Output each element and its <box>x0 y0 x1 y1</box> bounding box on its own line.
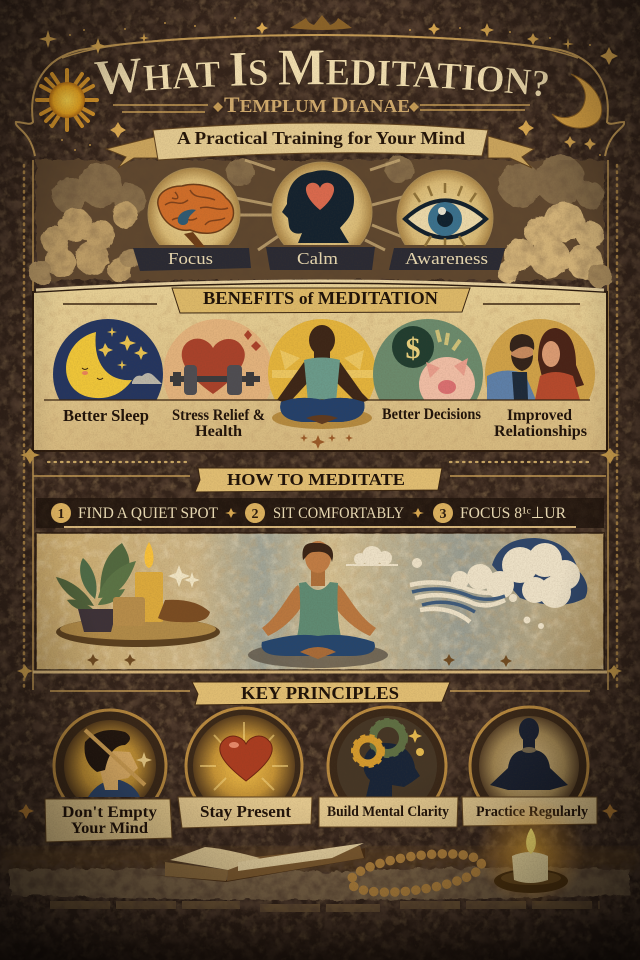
label: Improved Relationships <box>494 407 587 440</box>
icon: improved relationships <box>485 319 595 400</box>
icon: cloud and waves of thought <box>346 538 587 629</box>
label: Don't Empty Your Mind: Your Mind <box>71 820 148 837</box>
icon: sparkles <box>168 565 200 588</box>
heading: key principles <box>192 682 450 705</box>
label: Focus: Focus <box>168 249 213 268</box>
meditating figure legs (foreground) <box>280 398 364 424</box>
label: Improved Relationships: Improved <box>507 407 572 424</box>
icon: plant, candle and tray <box>56 542 220 647</box>
still life: stone table <box>0 860 640 920</box>
medallion: practice regularly <box>468 706 590 796</box>
step 1 <box>51 503 218 523</box>
icon: sun <box>37 70 97 130</box>
icon: brain <box>148 168 240 247</box>
label: Don't Empty Your Mind: Don't Empty <box>62 804 157 821</box>
medallion: do not empty <box>52 708 168 797</box>
sun rays behind head <box>235 160 410 250</box>
label: Build Mental Clarity: Build Mental Clarity <box>327 804 449 820</box>
label: Stress Relief and Health: Health <box>195 423 242 440</box>
cloud backdrop <box>28 155 612 288</box>
panel: three qualities <box>28 155 612 288</box>
label: Stay Present <box>178 797 312 828</box>
label: Stress Relief and Health: Stress Relief & <box>172 407 265 424</box>
small stars row <box>87 654 512 667</box>
label: Don't Empty Your Mind <box>45 799 172 842</box>
medallion: stay present <box>184 706 304 796</box>
panel: how to meditate <box>33 468 606 670</box>
step 2 <box>245 503 404 523</box>
small stars <box>300 434 353 449</box>
step 3 <box>433 503 566 523</box>
icon: meditating figure centre <box>268 319 376 429</box>
icon: woman meditating <box>248 541 388 668</box>
heading: how to: HOW TO MEDITATE <box>227 470 405 489</box>
step 2: 2 <box>252 507 258 522</box>
label: Stress Relief and Health <box>172 407 265 440</box>
heading: how to <box>195 468 442 492</box>
label: Focus <box>133 248 251 271</box>
panel: key principles <box>0 665 640 870</box>
parchment <box>33 283 607 451</box>
icon: eye <box>396 170 494 246</box>
label: Calm: Calm <box>297 249 338 268</box>
label: Calm <box>266 247 375 270</box>
label: Stay Present: Stay Present <box>200 802 291 821</box>
step 2: SIT COMFORTABLY <box>273 505 404 522</box>
heading: key principles: KEY PRINCIPLES <box>241 683 399 703</box>
icon: prayer beads <box>348 847 484 899</box>
banner: subtitle ribbon: A Practical Training for Your Mind <box>177 128 465 148</box>
banner: subtitle ribbon <box>106 123 534 168</box>
icon: better sleep <box>53 319 163 400</box>
scene backdrop <box>36 527 604 670</box>
step 1: 1 <box>58 507 64 522</box>
panel: header <box>14 15 626 690</box>
still life: warm wall band <box>0 848 640 870</box>
divider: corner stars and dots <box>20 448 620 464</box>
label: Practice Regularly <box>462 797 597 826</box>
label: Awareness <box>389 248 505 270</box>
label: Practice Regularly: Practice Regularly <box>476 804 588 820</box>
label: Awareness: Awareness <box>405 249 488 268</box>
icon: crescent moon <box>552 74 602 128</box>
star field <box>39 15 618 159</box>
heading: benefits <box>63 288 580 313</box>
panel: benefits <box>33 281 607 451</box>
step 3: FOCUS 8¹ᶜ⊥UR <box>460 505 566 522</box>
step 3: 3 <box>440 507 446 522</box>
label: Build Mental Clarity <box>319 797 458 827</box>
side stars <box>18 804 618 819</box>
medallion: mental clarity <box>326 706 448 796</box>
subtitle flourishes <box>113 103 530 112</box>
icon: better decisions <box>373 319 483 400</box>
icon: stress relief and health <box>163 319 270 400</box>
label: Better Decisions: Better Decisions <box>382 406 481 423</box>
icon: better decisions: $ <box>406 332 420 365</box>
step strip <box>36 498 604 528</box>
icon: head with heart <box>272 162 372 245</box>
label: Better Sleep: Better Sleep <box>63 406 149 425</box>
ornate frame <box>16 35 624 690</box>
step 1: FIND A QUIET SPOT <box>78 505 218 522</box>
label: Improved Relationships: Relationships <box>494 423 587 440</box>
subtitle: TEMPLUM DIANAE <box>224 92 410 117</box>
icon: open book <box>152 843 365 882</box>
title: WHAT IS MEDITATION? <box>94 50 548 96</box>
icon: lit candle <box>476 797 586 907</box>
heading: benefits: BENEFITS of MEDITATION <box>203 288 438 308</box>
